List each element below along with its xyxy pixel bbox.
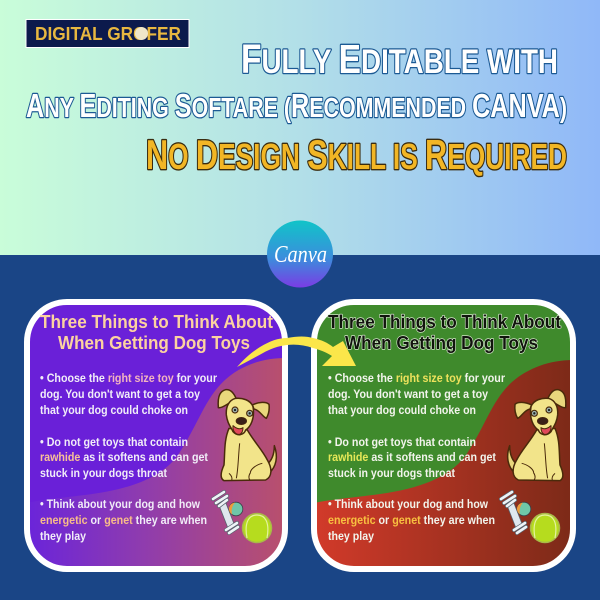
icon: dog toys bbox=[213, 492, 272, 542]
arrow: curved yellow arrow between cards bbox=[237, 336, 356, 367]
left card bullet points: • Do not get toys that contain bbox=[40, 435, 188, 449]
icon: dog toys bbox=[501, 492, 560, 542]
right card bullet points: dog. You don't want to get a toy bbox=[328, 387, 488, 401]
right card bullet points bbox=[328, 371, 505, 543]
left card bullet points: rawhide as it softens and can get bbox=[40, 450, 208, 464]
right card bullet points: energetic or genet they are when bbox=[328, 513, 495, 527]
heading line: Fully Editable with: FULLY EDITABLE WITH bbox=[241, 36, 558, 82]
left card bullet points: stuck in your dogs throat bbox=[40, 466, 167, 480]
right card bullet points: stuck in your dogs throat bbox=[328, 466, 455, 480]
icon: Canva badge bbox=[267, 220, 333, 288]
right card title bbox=[328, 311, 561, 353]
background gradient panel bbox=[0, 0, 600, 255]
left card bullet points: they play bbox=[40, 529, 86, 543]
right card title: When Getting Dog Toys bbox=[345, 332, 538, 353]
navy lower panel bbox=[0, 255, 600, 600]
heading line: Any Editing Softare: ANY EDITING SOFTARE (RECOMMENDED CANVA) bbox=[26, 87, 567, 124]
left card bullet points: • Think about your dog and how bbox=[40, 497, 200, 511]
right card: green and red design bbox=[314, 302, 573, 569]
icon: dog mirrored bbox=[508, 390, 566, 481]
right card background bbox=[314, 302, 573, 569]
logo: Digital Grofer bbox=[26, 20, 189, 48]
right card bullet points: • Choose the right size toy for your bbox=[328, 371, 505, 385]
right card bullet points: • Think about your dog and how bbox=[328, 497, 488, 511]
right card bullet points: rawhide as it softens and can get bbox=[328, 450, 496, 464]
left card title bbox=[40, 311, 273, 353]
icon: Canva badge: Canva bbox=[274, 242, 327, 268]
left card bullet points: energetic or genet they are when bbox=[40, 513, 207, 527]
left card white frame bbox=[27, 302, 285, 569]
left card bullet points bbox=[40, 371, 217, 543]
right card title: Three Things to Think About bbox=[328, 311, 561, 332]
logo: Digital Grofer: DIGITAL GROFER bbox=[35, 24, 181, 44]
left card title: Three Things to Think About bbox=[40, 311, 273, 332]
left card bullet points: • Choose the right size toy for your bbox=[40, 371, 217, 385]
right card bullet points: that your dog could choke on bbox=[328, 403, 476, 417]
left card bullet points: that your dog could choke on bbox=[40, 403, 188, 417]
right card bullet points: • Do not get toys that contain bbox=[328, 435, 476, 449]
left card bullet points: dog. You don't want to get a toy bbox=[40, 387, 200, 401]
left card: purple design bbox=[27, 302, 285, 569]
left card title: When Getting Dog Toys bbox=[58, 332, 250, 353]
left card background bbox=[27, 302, 285, 569]
heading line: No Design Skill is Required: NO DESIGN SKILL IS REQUIRED bbox=[146, 131, 567, 178]
icon: dog bbox=[218, 390, 276, 481]
right card bullet points: they play bbox=[328, 529, 374, 543]
right card white frame bbox=[314, 302, 573, 569]
